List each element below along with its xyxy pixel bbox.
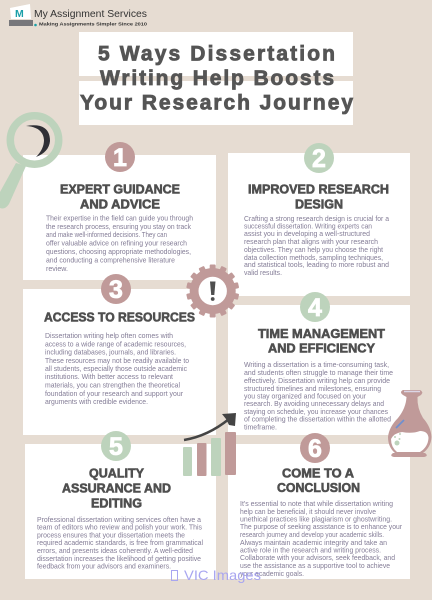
panel: access to resources bbox=[23, 274, 216, 435]
badge 4: 4 bbox=[308, 294, 322, 322]
body text 5: dissertation increases the likelihood of getting positive bbox=[37, 554, 201, 563]
title: 5 Ways Dissertation bbox=[98, 42, 335, 66]
badge 1 bbox=[105, 142, 135, 172]
body text 4: timeframe. bbox=[244, 422, 277, 432]
body text 2: research plan that aligns with your research bbox=[244, 237, 378, 246]
body text 2: data collection methods, sampling techniques, bbox=[244, 253, 383, 262]
body text 4: and students often struggle to manage their time bbox=[244, 368, 393, 377]
body text 3: institutions. With better access to relevant bbox=[45, 372, 173, 381]
watermark: VIC Images bbox=[184, 567, 261, 583]
title bbox=[79, 32, 353, 125]
badge 5: 5 bbox=[109, 433, 123, 461]
body text 4: research. By avoiding unnecessary delays and bbox=[244, 399, 384, 408]
logo: Making Assignments Simpler Since 2010 bbox=[39, 22, 147, 28]
body text 1: review. bbox=[46, 264, 68, 273]
body text 2: Crafting a strong research design is crucial for a bbox=[244, 214, 390, 223]
heading 2 bbox=[248, 182, 389, 212]
heading 5: ASSURANCE AND bbox=[62, 481, 171, 496]
body text 1: and make well-informed decisions. They can bbox=[46, 230, 167, 239]
arrow: growth trend bbox=[184, 413, 236, 440]
body text 6: research journey and develop your academic skills. bbox=[240, 530, 384, 539]
body text 2: objectives. They can help you choose the right bbox=[244, 245, 383, 254]
body text 1: Their expertise in the field can guide you through bbox=[46, 214, 193, 222]
body text 2: assist you in developing a well-structured bbox=[244, 229, 370, 238]
heading 3: ACCESS TO RESOURCES bbox=[44, 310, 195, 325]
body text 2: and statistical tools, leading to more robust and bbox=[244, 260, 389, 269]
body text 5: team of editors who review and polish your work. This bbox=[37, 522, 202, 532]
body text 2: valid results. bbox=[244, 268, 282, 277]
body text 2 bbox=[244, 214, 390, 277]
body text 6 bbox=[240, 499, 402, 578]
panel: expert guidance and advice bbox=[23, 142, 216, 280]
title: Your Research Journey bbox=[80, 92, 353, 114]
panel: quality assurance and editing bbox=[25, 431, 216, 579]
badge 6: 6 bbox=[308, 435, 322, 463]
heading 5: EDITING bbox=[91, 495, 142, 510]
body text 3: materials, you can strengthen the theoretical bbox=[45, 380, 180, 390]
body text 6: help can be beneficial, it should never involve bbox=[240, 507, 376, 516]
panel: come to a conclusion bbox=[228, 433, 410, 579]
heading 2: IMPROVED RESEARCH bbox=[248, 182, 389, 197]
heading 5 bbox=[62, 466, 171, 510]
body text 4: Writing a dissertation is a time-consuming task, bbox=[244, 360, 389, 369]
body text 4: structured timelines and milestones, ensuring bbox=[244, 384, 381, 393]
heading 1: EXPERT GUIDANCE bbox=[60, 182, 180, 197]
badge 2: 2 bbox=[312, 145, 326, 173]
badge 3: 3 bbox=[109, 276, 123, 304]
body text 1: the research process, ensuring you stay on track bbox=[46, 222, 191, 231]
body text 2: successful dissertation. Writing experts can bbox=[244, 222, 372, 230]
body text 3: all students, especially those outside academic bbox=[45, 364, 187, 373]
heading 1: AND ADVICE bbox=[80, 197, 160, 212]
body text 6: Always maintain academic integrity and take an bbox=[240, 538, 387, 547]
badge 2 bbox=[304, 143, 334, 173]
icon: magnifying glass bbox=[0, 116, 59, 208]
body text 3: arguments with credible evidence. bbox=[45, 397, 148, 406]
heading 4 bbox=[258, 326, 385, 356]
body text 4: you stay organized and focused on your bbox=[244, 392, 366, 400]
body text 1: offer valuable advice on refining your research bbox=[46, 239, 187, 248]
logo: My Assignment Services bbox=[34, 8, 147, 20]
heading 4: AND EFFICIENCY bbox=[268, 341, 375, 356]
body text 6: It's essential to note that while dissertation writing bbox=[240, 499, 393, 508]
heading 2: DESIGN bbox=[295, 197, 343, 212]
body text 5: process ensures that your dissertation meets the bbox=[37, 530, 185, 540]
heading 6: COME TO A bbox=[282, 465, 354, 480]
heading 4: TIME MANAGEMENT bbox=[258, 326, 385, 341]
body text 5: Professional dissertation writing services often have a bbox=[37, 515, 202, 524]
body text 4: of completing the dissertation within the allotted bbox=[244, 414, 391, 424]
body text 3 bbox=[45, 331, 189, 406]
body text 3: These resources may not be readily available to bbox=[45, 356, 189, 365]
body text 1 bbox=[46, 214, 193, 273]
heading 6: CONCLUSION bbox=[277, 480, 360, 495]
logo: M bbox=[15, 8, 24, 20]
badge 4 bbox=[300, 292, 330, 322]
body text 1: questions, choosing appropriate methodologies, bbox=[46, 247, 191, 256]
body text 5: errors, and presents ideas coherently. A well-edited bbox=[37, 546, 193, 555]
badge 6 bbox=[300, 433, 330, 463]
icon: flask bbox=[388, 390, 432, 457]
body text 4: effectively. Dissertation writing help can provide bbox=[244, 376, 390, 385]
body text 3: including databases, journals, and libraries. bbox=[45, 348, 176, 356]
body text 1: and conducting a comprehensive literature bbox=[46, 255, 175, 264]
body text 5: required academic standards, is free from grammatical bbox=[37, 538, 203, 547]
body text 6: use the assistance as a supportive tool to achieve bbox=[240, 561, 390, 570]
body text 6: unethical practices like plagiarism or ghostwriting. bbox=[240, 514, 392, 524]
body text 5 bbox=[37, 515, 203, 570]
panel: improved research design bbox=[228, 143, 410, 296]
badge 3 bbox=[101, 274, 131, 304]
body text 3: Dissertation writing help often comes with bbox=[45, 331, 173, 340]
heading 5: QUALITY bbox=[89, 466, 144, 481]
heading 6 bbox=[277, 465, 360, 495]
body text 6: The purpose of seeking assistance is to enhance your bbox=[240, 522, 402, 531]
body text 4: staying on schedule, you increase your chances bbox=[244, 407, 388, 416]
body text 4 bbox=[244, 360, 393, 432]
badge 5 bbox=[101, 431, 131, 461]
badge 1: 1 bbox=[113, 144, 127, 172]
title: Writing Help Boosts bbox=[100, 67, 334, 90]
panel: time management and efficiency bbox=[228, 292, 410, 435]
body text 6: Collaborate with your advisors, seek feedback, and bbox=[240, 553, 395, 562]
body text 6: your academic goals. bbox=[240, 569, 304, 578]
icon: growth bars bbox=[183, 432, 236, 476]
heading 1 bbox=[60, 182, 180, 212]
body text 5: feedback from your advisors and examiners. bbox=[37, 562, 171, 570]
logo bbox=[9, 4, 147, 28]
body text 6: active role in the research and writing process. bbox=[240, 546, 381, 554]
icon: gear with exclamation mark bbox=[186, 264, 239, 318]
body text 3: access to a wide range of academic resources, bbox=[45, 340, 186, 348]
body text 3: foundation of your research and support your bbox=[45, 389, 183, 398]
